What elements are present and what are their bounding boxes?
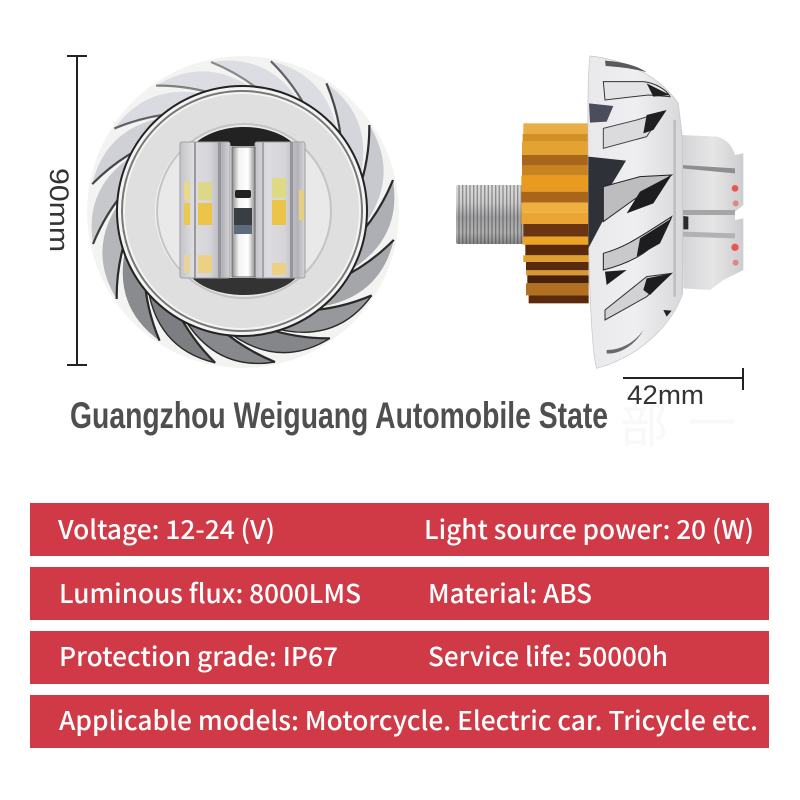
spec panel: protection and life: Protection grade: IP67 xyxy=(59,637,338,674)
faint background watermark: 一 xyxy=(688,398,736,451)
width dimension: 42mm: 42mm xyxy=(627,380,704,410)
spec panel: voltage and power: Voltage: 12-24 (V) xyxy=(57,510,275,547)
spec panel: voltage and power: Light source power: 20 (W) xyxy=(424,510,754,547)
spec panel: voltage and power xyxy=(30,503,769,556)
right LED module xyxy=(255,142,305,278)
inner light ring xyxy=(117,86,367,336)
product side view xyxy=(456,56,743,368)
faint background watermark: 部 xyxy=(620,400,668,453)
rear mount bracket xyxy=(682,135,743,290)
chrome dome housing xyxy=(588,56,683,368)
left LED module xyxy=(180,142,230,278)
spec panel: flux and material: Material: ABS xyxy=(428,574,592,611)
spec panel: protection and life: Service life: 50000h xyxy=(428,637,668,674)
title: Guangzhou Weiguang Automobile State xyxy=(70,395,608,436)
central chrome bracket xyxy=(232,147,255,277)
faint background watermark xyxy=(620,398,736,453)
gold heatsink xyxy=(521,123,589,303)
width dimension: 42mm xyxy=(623,368,743,410)
threaded bolt xyxy=(456,185,523,244)
spec panel: applicable models xyxy=(30,695,769,748)
outer swirl bezel xyxy=(79,48,407,376)
spec panel: flux and material: Luminous flux: 8000LMS xyxy=(59,574,361,611)
spec panel: flux and material xyxy=(30,567,769,620)
product front view xyxy=(79,48,407,376)
height dimension: 90mm: 90mm xyxy=(44,168,74,252)
spec panel: protection and life xyxy=(30,631,769,684)
dark reflector top and bottom xyxy=(192,127,296,295)
spec panel: applicable models: Applicable models: Motorcycle. Electric car. Tricycle etc. xyxy=(59,701,758,738)
